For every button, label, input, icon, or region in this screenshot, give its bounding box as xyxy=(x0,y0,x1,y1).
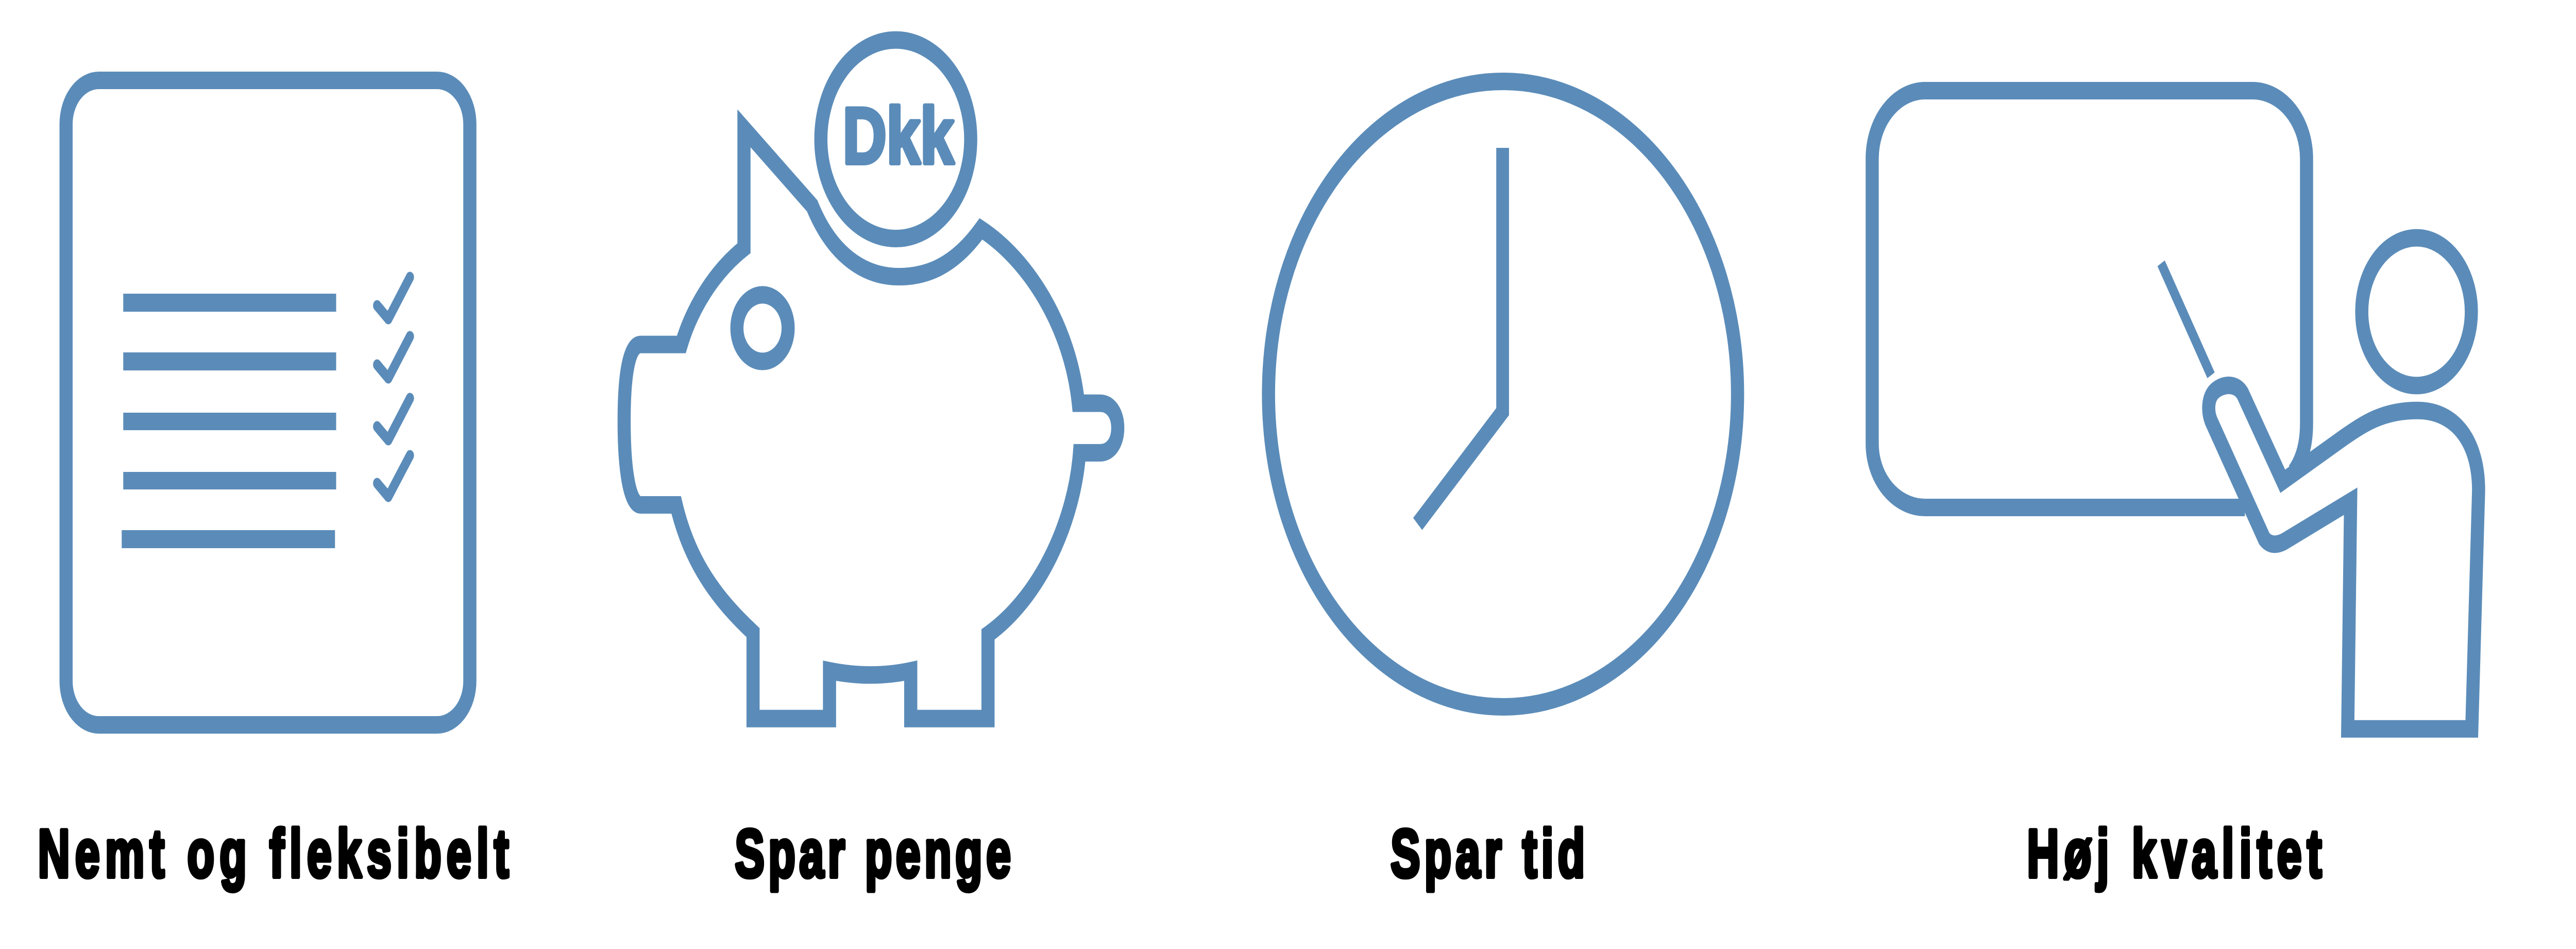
coin xyxy=(821,40,971,239)
clock face xyxy=(1268,81,1738,707)
board xyxy=(1872,91,2307,507)
icon: clock xyxy=(1268,81,1738,707)
coin label: Dkk: Dkk xyxy=(843,92,954,181)
panel: Spar penge xyxy=(624,40,1118,891)
icon: piggy bank with coin xyxy=(624,40,1118,719)
panel: Spar tid xyxy=(1268,81,1738,891)
panel: Høj kvalitet xyxy=(1872,91,2479,891)
clock hands xyxy=(1418,148,1503,524)
label: Spar tid: Spar tid xyxy=(1391,815,1585,891)
pointer xyxy=(2161,263,2211,375)
head xyxy=(2362,238,2471,385)
icon: checklist document xyxy=(66,80,470,725)
label: Nemt og fleksibelt: Nemt og fleksibelt xyxy=(38,815,509,891)
label: Høj kvalitet: Høj kvalitet xyxy=(2027,815,2322,891)
pig eye xyxy=(737,295,788,362)
check marks xyxy=(377,277,410,497)
document outline xyxy=(66,80,470,725)
label: Spar penge: Spar penge xyxy=(735,815,1011,891)
body and arm xyxy=(2209,385,2479,729)
panel: Nemt og fleksibelt xyxy=(38,80,509,891)
pig body xyxy=(624,128,1118,719)
text lines xyxy=(122,294,336,548)
icon: teacher at board xyxy=(1872,91,2479,729)
